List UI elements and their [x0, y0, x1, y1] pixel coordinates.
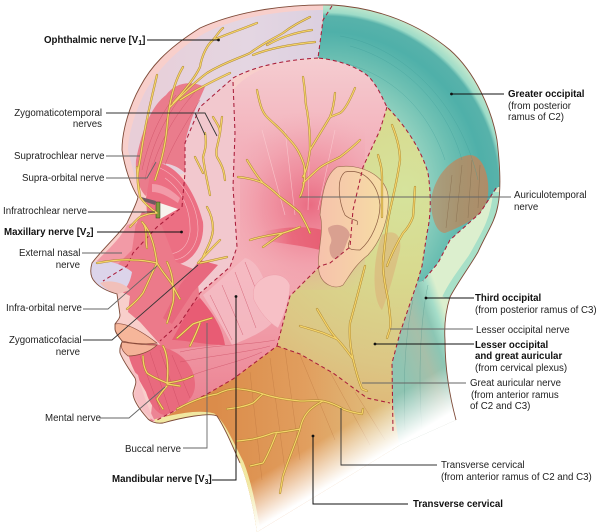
label: mental nerve — [45, 387, 165, 424]
orbicularis fibres — [160, 168, 198, 260]
label: transverse cervical territory: Transverse cervical — [413, 499, 503, 510]
iris — [156, 202, 160, 218]
label: zygomaticofacial nerve: nerve — [56, 347, 80, 358]
label: zygomaticofacial nerve — [9, 265, 198, 358]
frontalis muscle — [136, 83, 205, 196]
territory: ophthalmic nerve scalp — [128, 10, 323, 182]
label: great auricular nerve: Great auricular nerve — [470, 378, 561, 389]
upper lip — [115, 324, 157, 344]
label: mandibular nerve: 3 — [205, 479, 209, 486]
colored nerve territories and muscles — [91, 0, 520, 532]
label: auriculotemporal nerve — [300, 190, 587, 213]
label: mental nerve: Mental nerve — [45, 413, 101, 424]
label: external nasal nerve — [19, 248, 122, 271]
label: great auricular nerve: (from anterior ramus — [471, 390, 559, 401]
territory: neck transverse cervical — [157, 346, 400, 532]
label: greater occipital: Greater occipital — [508, 89, 584, 100]
ear helix — [339, 171, 380, 250]
bottom fade to white — [200, 300, 520, 532]
label: transverse cervical nerve: Transverse cervical — [441, 460, 525, 471]
chin skin — [128, 366, 155, 421]
label: ophthalmic nerve: ] — [142, 35, 145, 46]
label: zygomaticotemporal nerves: Zygomaticotemporal — [14, 108, 102, 119]
neck striations — [250, 350, 385, 480]
label: auriculotemporal nerve: nerve — [514, 202, 538, 213]
label: ophthalmic nerve: Ophthalmic nerve [V — [44, 35, 138, 46]
label: buccal nerve: Buccal nerve — [125, 444, 181, 455]
nostril — [100, 281, 130, 294]
label: maxillary nerve — [4, 227, 183, 239]
label: zygomaticotemporal nerves: nerves — [73, 119, 102, 130]
scalp striations — [262, 120, 335, 215]
label: ophthalmic nerve — [44, 35, 220, 47]
label: infra-orbital nerve — [6, 266, 157, 314]
label: lesser occipital and great auricular: (from cervical plexus) — [475, 363, 567, 374]
label: greater occipital — [450, 89, 584, 123]
label: zygomaticofacial nerve: Zygomaticofacial — [9, 335, 82, 346]
platysma edge strip — [155, 415, 258, 532]
territory: third occipital — [392, 187, 510, 450]
nose and cheek muscles — [118, 212, 218, 350]
label: zygomaticotemporal nerves — [14, 108, 217, 136]
head outline — [91, 5, 500, 463]
label: infratrochlear nerve: Infratrochlear nerve — [3, 206, 87, 217]
sternocleidomastoid tan patch — [374, 232, 400, 310]
chin fibres — [140, 350, 190, 412]
label: mandibular nerve: ] — [208, 474, 212, 485]
depressor and chin muscles — [128, 344, 195, 415]
masseter tendon pale — [203, 258, 275, 345]
label: transverse cervical nerve: (from anterior ramus of C2 and C3) — [441, 472, 592, 483]
ear concha — [328, 225, 350, 259]
lower lip — [121, 342, 157, 356]
occipital patch fibres — [446, 160, 480, 228]
masseter fibres — [180, 262, 275, 376]
nose — [91, 261, 132, 294]
lateral zygomatic band — [163, 260, 218, 324]
ear — [318, 166, 388, 287]
label: lesser occipital and great auricular: and great auricular — [475, 351, 562, 362]
label: greater occipital: ramus of C2) — [508, 112, 564, 123]
label: great auricular nerve: of C2 and C3) — [470, 401, 530, 412]
neck back stripes — [404, 285, 428, 430]
label: mandibular nerve — [112, 295, 237, 486]
eye — [160, 203, 178, 219]
territory: mandibular — [150, 60, 387, 422]
orbicularis oculi ring — [146, 163, 203, 265]
buccinator muscle — [172, 298, 225, 345]
label: greater occipital: (from posterior — [508, 101, 572, 112]
frontalis fibres — [142, 92, 200, 180]
label: infra-orbital nerve: Infra-orbital nerve — [6, 303, 82, 314]
label: auriculotemporal nerve: Auriculotemporal — [514, 190, 587, 201]
nasal muscle — [96, 222, 136, 264]
label: third occipital: Third occipital — [475, 293, 541, 304]
label: third occipital — [425, 293, 597, 316]
territory: greater occipital — [318, 5, 500, 283]
label: lesser occipital and great auricular — [374, 340, 567, 374]
label: ophthalmic nerve: 1 — [138, 40, 142, 47]
eyebrow and eyelid fold — [152, 184, 180, 203]
label: third occipital: (from posterior ramus of C3) — [475, 305, 597, 316]
label: supratrochlear nerve: Supratrochlear nerve — [14, 151, 104, 162]
temporalis muscle fan — [240, 133, 365, 286]
label: supra-orbital nerve: Supra-orbital nerve — [22, 173, 104, 184]
label: maxillary nerve: 2 — [86, 232, 90, 239]
nerves dark casing — [97, 17, 415, 493]
label: buccal nerve — [125, 323, 207, 455]
head and neck illustration — [91, 0, 520, 532]
label: maxillary nerve: Maxillary nerve [V — [4, 227, 86, 238]
parotid gland — [253, 275, 290, 328]
label: supra-orbital nerve — [22, 162, 156, 184]
label: external nasal nerve: External nasal — [19, 248, 80, 259]
label: external nasal nerve: nerve — [56, 260, 80, 271]
occipital muscle patch — [431, 155, 488, 233]
nerves bright core — [97, 17, 415, 493]
label: great auricular nerve — [362, 378, 561, 412]
territory: temple pale band — [157, 78, 237, 293]
muscle in front of ear — [262, 227, 322, 250]
label: transverse cervical nerve — [341, 408, 592, 483]
rim of upper neck — [446, 192, 497, 298]
label: lesser occipital nerve: Lesser occipital nerve — [476, 325, 570, 336]
label: transverse cervical territory — [312, 435, 503, 510]
dashed territory boundaries — [103, 6, 496, 433]
territory: lesser occipital and great auricular — [277, 107, 430, 405]
label: lesser occipital and great auricular: Lesser occipital — [475, 340, 548, 351]
head silhouette base — [91, 5, 500, 532]
label: mandibular nerve: Mandibular nerve [V — [112, 474, 205, 485]
nasion shadow — [141, 197, 156, 205]
greater occipital striations — [330, 36, 478, 180]
label: maxillary nerve: ] — [90, 227, 94, 238]
